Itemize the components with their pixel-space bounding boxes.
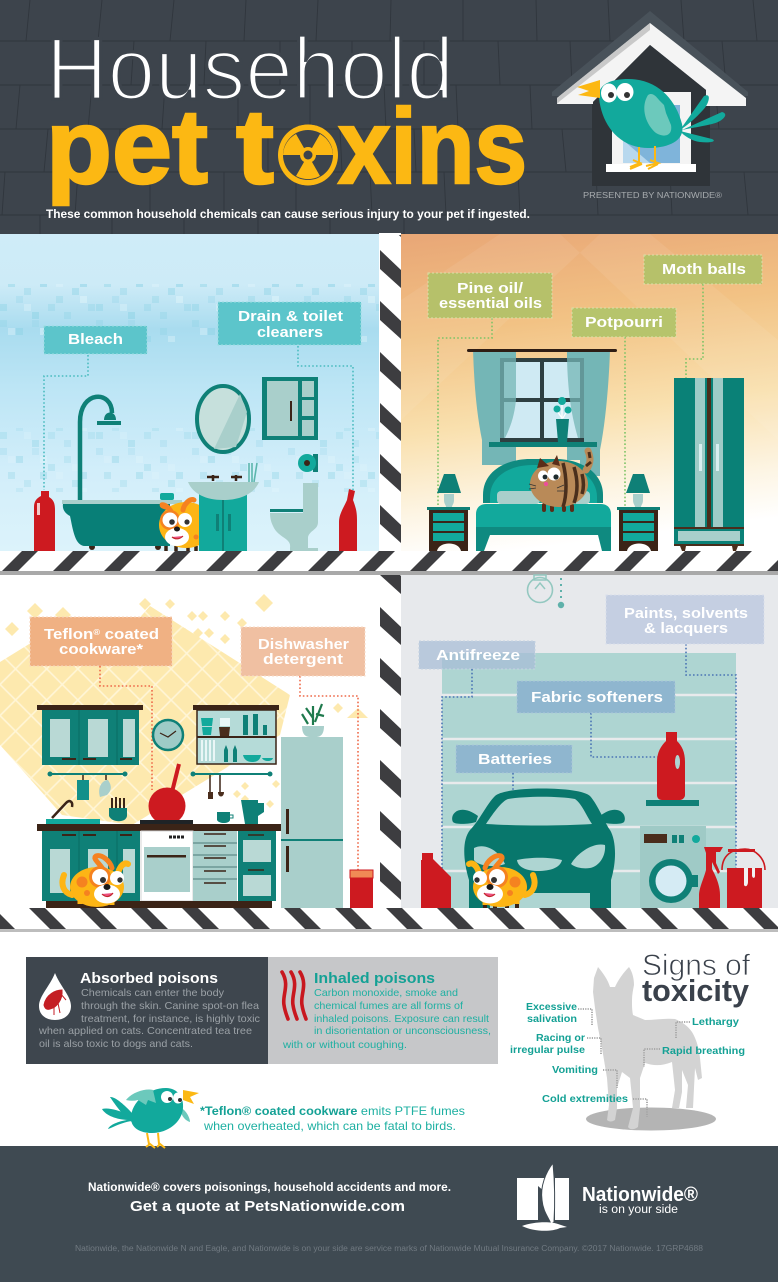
clock <box>153 720 183 750</box>
label: Bleach <box>44 326 147 354</box>
mirror <box>197 386 249 452</box>
car <box>452 788 625 908</box>
shower <box>80 397 121 500</box>
dog in garage <box>469 856 535 908</box>
footer call to action <box>88 1182 451 1215</box>
title line: pet toxins: o <box>279 88 337 206</box>
bird mascot: bottom note <box>102 1088 199 1148</box>
symptom labels: Excessive <box>526 1001 577 1013</box>
title line: pet toxins: xins <box>338 88 527 206</box>
label: Drain & toilet cleaners: Drain & toilet <box>238 308 343 325</box>
symptom labels: irregular pulse <box>510 1044 585 1056</box>
label: Potpourri: Potpourri <box>585 314 663 331</box>
upper cabinets <box>37 705 143 765</box>
label: Pine oil / essential oils <box>428 273 552 318</box>
panel: garage <box>401 575 778 908</box>
body text <box>282 987 491 1051</box>
label: Pine oil / essential oils: essential oils <box>439 295 542 312</box>
title line: Household: Household <box>46 19 454 118</box>
logo wordmark: is on your side <box>599 1204 678 1216</box>
label: Fabric softeners <box>517 681 675 713</box>
symptom labels: salivation <box>527 1013 577 1025</box>
body text: with or without coughing. <box>282 1039 407 1051</box>
body text: in disorientation or unconsciousness, <box>314 1025 491 1037</box>
nightstand and lamp: right <box>617 474 660 551</box>
icon: hanging light bulb <box>528 575 564 608</box>
logo wordmark: Nationwide® <box>582 1184 698 1206</box>
bathtub <box>62 493 182 550</box>
body text <box>38 987 260 1050</box>
heading: Signs of toxicity: toxicity <box>642 973 750 1008</box>
panel: kitchen <box>0 575 379 908</box>
dotted leader lines <box>438 284 703 515</box>
note: Teflon and birds <box>200 1104 465 1133</box>
floor stripe: lower <box>0 908 778 932</box>
label: Teflon coated cookware: Teflon <box>44 626 88 643</box>
label: Potpourri <box>572 308 676 337</box>
bed <box>476 459 611 551</box>
heading: Absorbed poisons <box>80 971 218 987</box>
label: Pine oil / essential oils: Pine oil/ <box>457 280 524 297</box>
label: Moth balls: Moth balls <box>662 261 746 278</box>
washing machine <box>640 826 706 908</box>
label: Antifreeze <box>419 641 535 669</box>
dog in kitchen <box>62 856 128 908</box>
panel: absorbed poisons <box>26 957 268 1064</box>
label: Fabric softeners: Fabric softeners <box>531 689 663 706</box>
dog silhouette <box>593 967 702 1129</box>
bedroom background <box>401 234 778 551</box>
footer <box>0 1146 778 1282</box>
paint can <box>722 849 765 908</box>
label: Batteries <box>456 745 572 773</box>
label: Dishwasher detergent <box>241 627 365 676</box>
presented by: PRESENTED BY NATIONWIDE® <box>583 190 723 200</box>
floor stripe: upper <box>0 551 778 575</box>
body text: through the skin. Canine spot-on flea <box>81 1000 259 1012</box>
curtains and window <box>467 349 617 476</box>
body text: when applied on cats. Concentrated tea tree <box>38 1025 252 1037</box>
body text: inhaled poisons. Exposure can result <box>314 1013 489 1025</box>
label: Dishwasher detergent: Dishwasher <box>258 636 349 653</box>
kitchen background <box>0 575 379 908</box>
title line: pet toxins: pet <box>46 88 208 206</box>
label: Paints, solvents & lacquers: Paints, solvents <box>624 605 748 622</box>
header: shingled roof background <box>0 0 778 234</box>
label: Teflon coated cookware: ® <box>93 628 100 637</box>
wardrobe <box>674 378 744 551</box>
footer call to action: Nationwide® covers poisonings, household accidents and more. <box>88 1182 451 1194</box>
dog peeking out <box>159 500 213 551</box>
toilet <box>270 483 318 551</box>
logo: Nationwide N and eagle <box>517 1163 569 1231</box>
label: Paints, solvents & lacquers <box>606 595 764 644</box>
subtitle: These common household chemicals can cause serious injury to your pet if ingested. <box>46 209 530 221</box>
red jug <box>421 853 451 908</box>
logo wordmark <box>582 1184 698 1216</box>
symptom labels: Rapid breathing <box>662 1045 745 1057</box>
label: Dishwasher detergent: detergent <box>263 651 343 668</box>
symptom labels: Vomiting <box>552 1064 598 1076</box>
title line: pet toxins <box>46 88 527 206</box>
red bottles <box>34 489 357 551</box>
label: Batteries: Batteries <box>478 751 552 768</box>
symptom labels: Racing or <box>536 1032 585 1044</box>
garage door <box>442 653 736 908</box>
sink and cabinet <box>188 463 259 551</box>
icon: birdhouse <box>552 11 748 186</box>
label: Teflon coated cookware: coated <box>100 626 159 643</box>
open shelf <box>193 705 279 764</box>
symptom labels <box>510 1001 745 1105</box>
signs of toxicity: dog diagram <box>510 949 751 1130</box>
toilet roll <box>298 454 318 472</box>
bathroom background <box>0 234 379 551</box>
icon: red fumes <box>282 972 306 1019</box>
panel: inhaled poisons <box>268 957 498 1064</box>
counter items <box>46 797 264 824</box>
label: Paints, solvents & lacquers: & lacquers <box>644 620 728 637</box>
body text: oil is also toxic to dogs and cats. <box>39 1038 193 1050</box>
rails with towel, mitt and utensils <box>48 772 272 800</box>
note: Teflon and birds: *Teflon® coated cookware emits PTFE fumes <box>200 1104 465 1118</box>
frying pan <box>148 764 186 824</box>
symptom leader lines <box>578 1009 690 1117</box>
dotted leader lines <box>44 346 353 490</box>
bird mascot on house <box>577 79 725 169</box>
red detergent box <box>350 870 373 908</box>
label: Antifreeze: Antifreeze <box>436 647 520 664</box>
heading: Signs of toxicity: Signs of <box>642 949 751 982</box>
spray bottle <box>699 847 723 908</box>
title line: pet toxins: t <box>236 88 274 206</box>
note: Teflon and birds: when overheated, which can be fatal to birds. <box>203 1119 456 1133</box>
heading: Signs of toxicity <box>642 949 751 1008</box>
nightstand and lamp: left <box>427 474 470 551</box>
icon: blood drop with flea <box>39 973 71 1020</box>
symptom labels: Cold extremities <box>542 1093 628 1105</box>
dotted leader lines <box>100 666 358 870</box>
panel: bathroom <box>0 234 379 551</box>
panel: bedroom <box>401 234 778 551</box>
fridge with plant <box>281 704 343 908</box>
label: Moth balls <box>644 255 762 284</box>
medicine cabinet <box>262 377 318 440</box>
symptom labels: Lethargy <box>692 1016 739 1028</box>
legal text: Nationwide, the Nationwide N and Eagle, and Nationwide is on your side are service marks of Nationwide Mutual Insurance Company. ©2017 Nationwide. 17GRP4688 <box>75 1244 703 1253</box>
icon: radiation symbol <box>278 124 338 186</box>
label: Teflon coated cookware: cookware* <box>59 641 143 658</box>
label: Drain & toilet cleaners: cleaners <box>257 324 323 341</box>
label: Teflon coated cookware <box>30 617 172 666</box>
body text: Carbon monoxide, smoke and <box>314 987 458 999</box>
dog shadow <box>586 1108 716 1130</box>
body text: treatment, for instance, is highly toxic <box>81 1013 260 1025</box>
body text: Chemicals can enter the body <box>81 987 225 999</box>
label: Bleach: Bleach <box>68 331 123 348</box>
dotted leader lines <box>442 644 736 880</box>
shelf with softener bottle <box>646 732 699 806</box>
column dividers <box>379 233 401 931</box>
heading: Inhaled poisons <box>314 971 435 987</box>
lower cabinets, oven and drawers <box>37 824 281 908</box>
garage background <box>401 575 778 908</box>
footer call to action: Get a quote at PetsNationwide.com <box>130 1198 405 1215</box>
label: Drain & toilet cleaners <box>218 302 361 345</box>
cat <box>529 451 591 510</box>
body text: chemical fumes are all forms of <box>314 1000 463 1012</box>
